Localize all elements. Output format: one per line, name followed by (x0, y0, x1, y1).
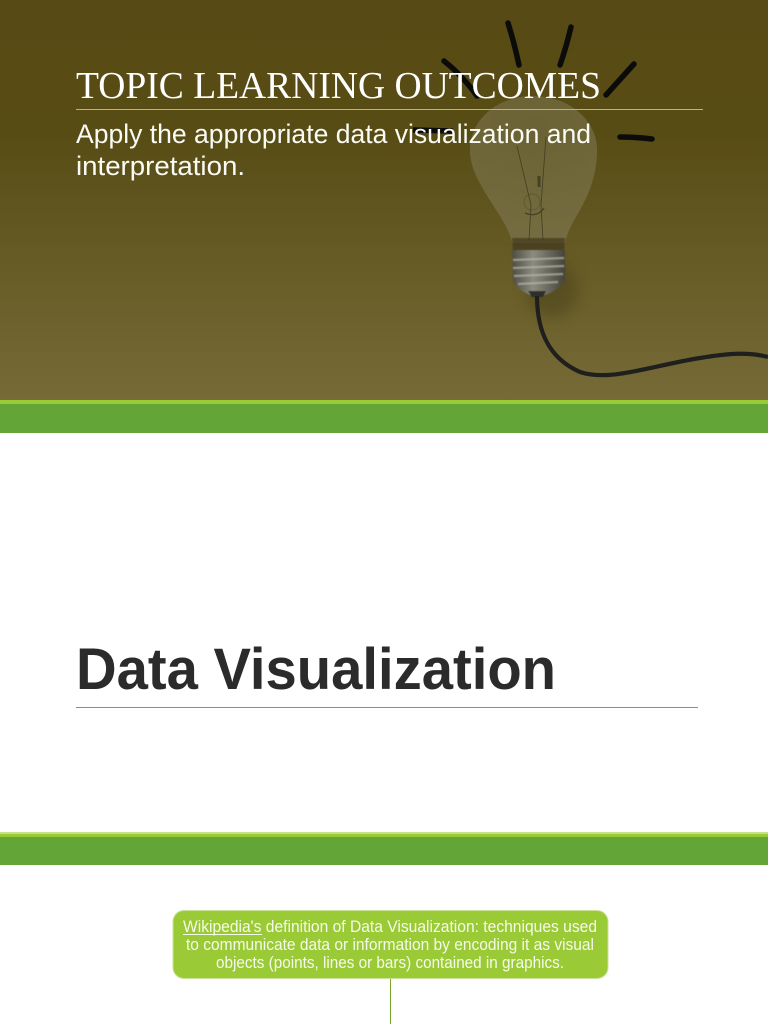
power cord (537, 296, 768, 375)
connector line (390, 979, 391, 1024)
callout: wikipedia definition: to communicate data or information by encoding it as visual (186, 936, 594, 954)
rays (413, 23, 652, 139)
text block: learning outcome (76, 119, 591, 181)
bulb glass (470, 96, 597, 243)
bulb neck (512, 238, 565, 252)
bulb screw base (512, 250, 565, 297)
icon: light bulb with cord and rays (413, 23, 768, 375)
callout: wikipedia definition: objects (points, lines or bars) contained in graphics. (216, 954, 564, 972)
title: topic learning outcomes: TOPIC LEARNING OUTCOMES (76, 65, 601, 107)
bulb filament (517, 137, 546, 240)
heading underline (76, 707, 698, 708)
panel: top slide background (0, 0, 768, 400)
text block: learning outcome: Apply the appropriate data visualization and (76, 119, 591, 149)
band: second green divider (0, 832, 768, 865)
heading: data visualization: Data Visualization (76, 637, 556, 702)
title underline (76, 109, 703, 110)
callout: wikipedia definition: Wikipedia's definition of Data Visualization: techniques used (183, 918, 597, 936)
callout: wikipedia definition (173, 910, 608, 978)
bulb shadow (526, 262, 578, 318)
band: first green divider (0, 400, 768, 433)
text block: learning outcome: interpretation. (76, 151, 245, 181)
